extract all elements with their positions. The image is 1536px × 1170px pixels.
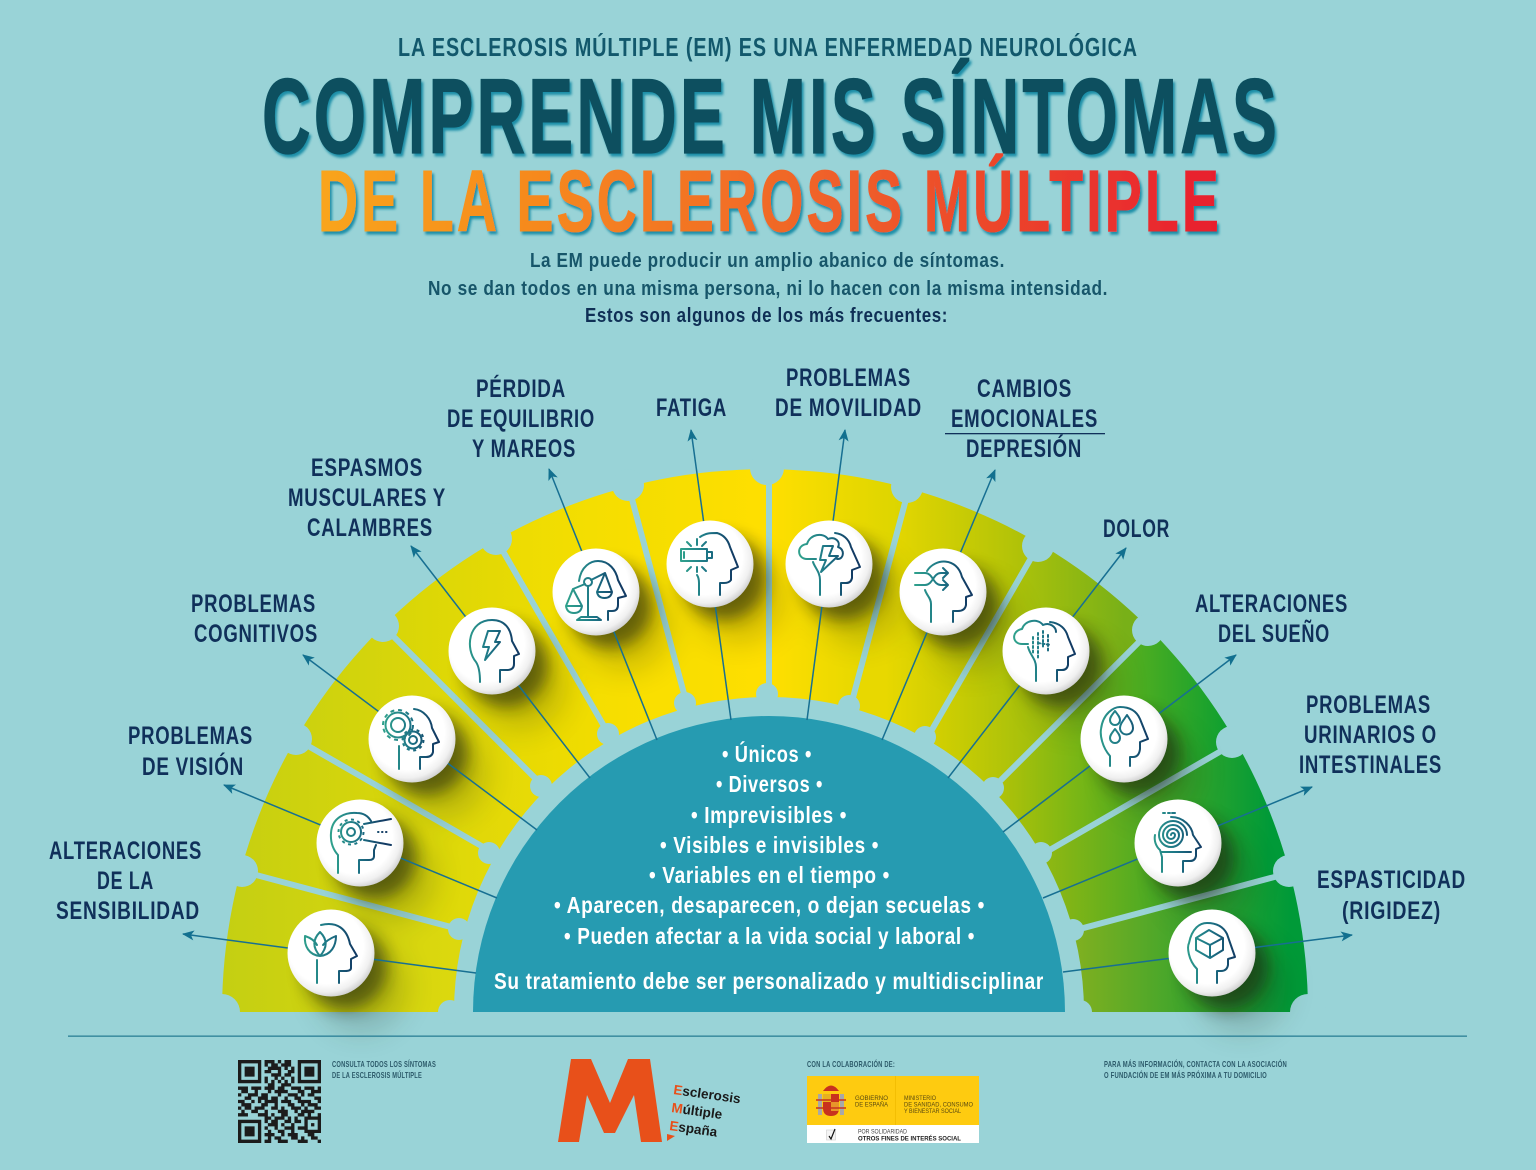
- label: problemas cognitivos: PROBLEMAS: [191, 590, 316, 618]
- QR caption: CONSULTA TODOS LOS SÍNTOMAS: [332, 1059, 436, 1069]
- centre text: • Únicos •: [722, 740, 812, 767]
- label: problemas de movilidad: PROBLEMAS: [786, 364, 911, 392]
- logo: Esclerosis Múltiple España: Múltiple: [671, 1100, 724, 1122]
- intro text: No se dan todos en una misma persona, ni lo hacen con la misma intensidad.: [428, 278, 1108, 300]
- label: cambios emocionales / depresión: DEPRESIÓN: [966, 433, 1082, 463]
- centre text: • Pueden afectar a la vida social y laboral •: [564, 923, 975, 949]
- label: alteraciones del sueño: ALTERACIONES: [1195, 590, 1348, 618]
- arrows: [183, 430, 1352, 973]
- label: espasticidad (rigidez): (RIGIDEZ): [1342, 897, 1441, 925]
- logo: Gobierno de España: Y BIENESTAR SOCIAL: [904, 1108, 961, 1115]
- centre text: [494, 740, 1044, 994]
- centre text: • Aparecen, desaparecen, o dejan secuelas •: [554, 892, 985, 918]
- logo: Gobierno de España: [807, 1076, 979, 1143]
- label: problemas urinarios o intestinales: [1299, 691, 1442, 779]
- logo: Gobierno de España: GOBIERNO: [855, 1095, 888, 1102]
- centre text: • Diversos •: [716, 771, 823, 797]
- contact text: [1104, 1058, 1287, 1080]
- label: cambios emocionales / depresión: EMOCIONALES: [951, 405, 1098, 433]
- centre text: • Visibles e invisibles •: [660, 832, 879, 858]
- label: problemas de visión: DE VISIÓN: [142, 751, 244, 781]
- contact text: O FUNDACIÓN DE EM MÁS PRÓXIMA A TU DOMICILIO: [1104, 1069, 1267, 1080]
- label: problemas cognitivos: [191, 590, 318, 648]
- logo: Gobierno de España: MINISTERIO: [904, 1095, 936, 1102]
- label: cambios emocionales / depresión: CAMBIOS: [977, 375, 1072, 403]
- logo: Esclerosis Múltiple España: [558, 1059, 742, 1142]
- label: alteraciones del sueño: [1195, 590, 1348, 648]
- intro text: [428, 250, 1108, 327]
- icon: battery head: [666, 520, 754, 608]
- logo: Esclerosis Múltiple España: Esclerosis: [673, 1082, 742, 1106]
- label: alteraciones de la sensibilidad: DE LA: [97, 867, 154, 895]
- panel: centre semicircle: [473, 716, 1065, 1012]
- logo: Gobierno de España: OTROS FINES DE INTERÉS SOCIAL: [858, 1134, 961, 1142]
- icon: rain cloud head: [1002, 608, 1090, 694]
- label: pérdida de equilibrio y mareos: [447, 374, 595, 463]
- icon: cogs head: [368, 696, 456, 782]
- label: problemas urinarios o intestinales: PROBLEMAS: [1306, 691, 1431, 719]
- label: pérdida de equilibrio y mareos: Y MAREOS: [472, 435, 576, 463]
- icon: spiral head: [1134, 800, 1222, 886]
- centre text: • Imprevisibles •: [691, 802, 847, 828]
- centre text: • Variables en el tiempo •: [649, 862, 890, 888]
- label: espasmos musculares y calambres: MUSCULARES Y: [288, 484, 446, 512]
- collaboration caption: CON LA COLABORACIÓN DE:: [807, 1058, 895, 1069]
- label: problemas de movilidad: [775, 364, 922, 422]
- icon: drops head: [1080, 696, 1168, 782]
- footer: [68, 1036, 1467, 1143]
- label: alteraciones de la sensibilidad: SENSIBILIDAD: [56, 897, 200, 925]
- label: alteraciones del sueño: DEL SUEÑO: [1218, 618, 1330, 648]
- label: alteraciones de la sensibilidad: [49, 837, 202, 925]
- label: fatiga: FATIGA: [656, 394, 727, 422]
- eyebrow heading: LA ESCLEROSIS MÚLTIPLE (EM) ES UNA ENFERMEDAD NEUROLÓGICA: [398, 32, 1138, 62]
- QR caption: DE LA ESCLEROSIS MÚLTIPLE: [332, 1069, 422, 1080]
- contact text: PARA MÁS INFORMACIÓN, CONTACTA CON LA ASOCIACIÓN: [1104, 1058, 1287, 1069]
- logo: Gobierno de España: DE SANIDAD, CONSUMO: [904, 1102, 973, 1108]
- label: pérdida de equilibrio y mareos: DE EQUILIBRIO: [447, 405, 595, 433]
- label: problemas urinarios o intestinales: INTESTINALES: [1299, 751, 1442, 779]
- intro text: La EM puede producir un amplio abanico de síntomas.: [530, 250, 1005, 272]
- label: problemas urinarios o intestinales: URINARIOS O: [1304, 721, 1437, 749]
- label: problemas cognitivos: COGNITIVOS: [194, 620, 318, 648]
- label: espasmos musculares y calambres: CALAMBRES: [307, 514, 433, 542]
- intro text: Estos son algunos de los más frecuentes:: [585, 305, 948, 327]
- label: espasmos musculares y calambres: ESPASMOS: [311, 454, 423, 482]
- label: problemas de movilidad: DE MOVILIDAD: [775, 394, 922, 422]
- label: espasmos musculares y calambres: [288, 454, 446, 542]
- QR code: [238, 1062, 321, 1141]
- logo: Gobierno de España: DE ESPAÑA: [855, 1100, 889, 1108]
- label: espasticidad (rigidez): ESPASTICIDAD: [1317, 866, 1466, 894]
- icon: cloud bolt head: [786, 520, 872, 608]
- icon: shuffle head: [900, 548, 986, 636]
- icon: spasm bolt head: [448, 608, 536, 694]
- icon: plant head: [288, 910, 374, 996]
- QR caption: [332, 1059, 436, 1080]
- icon: balance head: [552, 548, 640, 636]
- label: cambios emocionales / depresión: [945, 375, 1105, 463]
- label: espasticidad (rigidez): [1317, 866, 1466, 925]
- logo: Esclerosis Múltiple España: España: [669, 1118, 719, 1140]
- fan segments: [222, 469, 1308, 1012]
- tight circle shadows: [303, 536, 1268, 1009]
- panel: symptom fan: [149, 392, 1389, 1031]
- label: alteraciones de la sensibilidad: ALTERACIONES: [49, 837, 202, 865]
- wide soft shadows: [317, 554, 1286, 1031]
- label: pérdida de equilibrio y mareos: PÉRDIDA: [476, 374, 566, 403]
- icon: vision head: [316, 800, 404, 886]
- label: problemas de visión: [128, 722, 253, 781]
- label: problemas de visión: PROBLEMAS: [128, 722, 253, 750]
- logo: Gobierno de España: POR SOLIDARIDAD: [858, 1128, 907, 1136]
- icon: cube head: [1168, 910, 1256, 996]
- centre text: Su tratamiento debe ser personalizado y multidisciplinar: [494, 968, 1044, 994]
- header: [262, 32, 1280, 327]
- label: dolor: DOLOR: [1103, 515, 1170, 543]
